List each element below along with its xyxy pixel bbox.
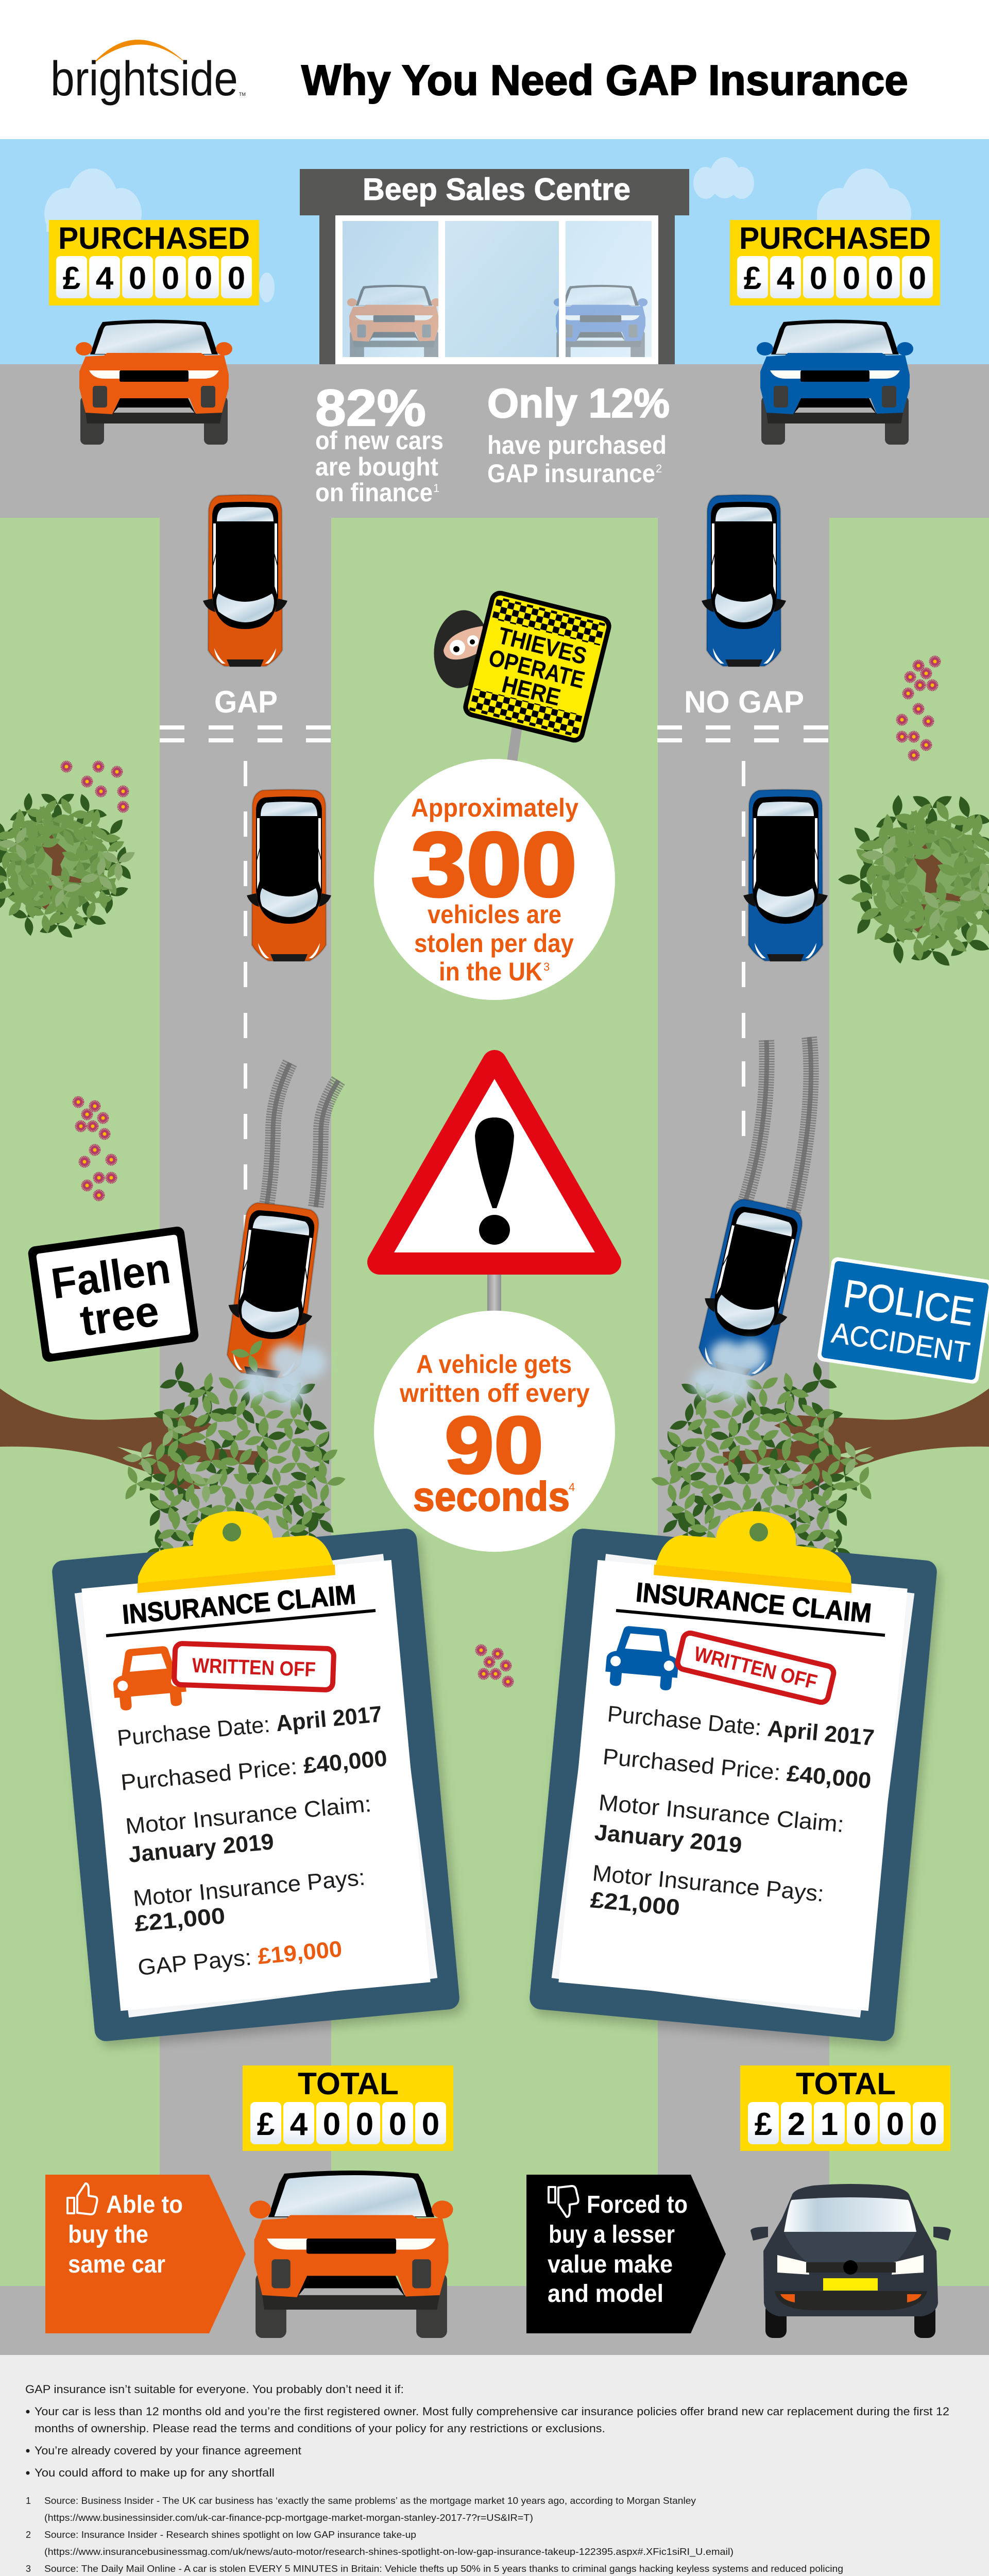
flowers — [62, 656, 940, 1687]
sources: Source: The Daily Mail Online - A car is stolen EVERY 5 MINUTES in Britain: Vehicle thefts up 50% in 5 years thanks to criminal gangs hacking keyless systems and reduced policing — [44, 2564, 843, 2574]
written off stamp — [676, 1632, 835, 1704]
price sign right: PURCHASED — [739, 221, 931, 256]
circle stat: 300 stolen: Approximately — [411, 793, 578, 822]
police accident sign: ACCIDENT — [829, 1316, 972, 1369]
crashed blue car — [690, 1195, 811, 1381]
road label NO GAP: NO GAP — [684, 685, 804, 719]
disclaimer text: Your car is less than 12 months old and you’re the first registered owner. Most fully comprehensive car insurance policies offer brand new car replacement during the first 12 — [35, 2405, 949, 2418]
clipboard right — [528, 1511, 938, 2042]
stat: 82% finance: on finance — [315, 478, 433, 507]
brightside logo: TM — [239, 92, 246, 97]
road right — [658, 518, 829, 2290]
road top — [0, 364, 989, 518]
blue car top view 1 — [702, 495, 786, 667]
claim details: GAP Pays: £19,000 — [137, 1936, 343, 1980]
clouds — [44, 157, 911, 302]
written off stamp: WRITTEN OFF — [192, 1654, 316, 1681]
price sign left — [49, 220, 259, 306]
stat: only 12% GAP: GAP insurance — [487, 459, 655, 488]
grass — [0, 518, 989, 2286]
police accident sign: POLICE — [841, 1272, 977, 1334]
claim details: £21,000 — [589, 1887, 681, 1921]
claim details: Purchased Price: £40,000 — [120, 1745, 388, 1795]
total sign left — [243, 2065, 453, 2151]
arrow: forced to buy a lesser value make and model: and model — [548, 2280, 663, 2308]
circle stat: written off every 90 seconds: seconds — [413, 1473, 570, 1519]
total sign right: £21000 — [755, 2107, 937, 2142]
sales centre building — [300, 169, 689, 364]
car icon — [604, 1624, 681, 1691]
clipboard left — [51, 1511, 461, 2042]
claim details: Purchase Date: April 2017 — [116, 1702, 383, 1751]
sources: (https://www.businessinsider.com/uk-car-finance-pcp-mortgage-market-morgan-stanley-2017-7?r=US&IR=T) — [44, 2513, 533, 2523]
claim details: Motor Insurance Pays: — [591, 1860, 825, 1907]
arrow: forced to buy a lesser value make and model: Forced to — [587, 2191, 688, 2218]
thieves operate here sign — [461, 588, 613, 745]
circle stat: written off every 90 seconds: 4 — [569, 1481, 575, 1494]
warning triangle sign — [380, 1062, 609, 1314]
circle stat: written off every 90 seconds: written off every — [399, 1379, 590, 1408]
arrow: forced to buy a lesser value make and model: value make — [548, 2251, 673, 2278]
stat: 82% finance: are bought — [315, 452, 438, 481]
clip — [654, 1511, 851, 1593]
claim details — [116, 1702, 388, 1980]
orange car front — [76, 319, 232, 445]
circle stat: 300 stolen: in the UK — [439, 957, 542, 986]
sources: (https://www.insurancebusinessmag.com/uk/news/auto-motor/research-shines-spotlight-on-low-gap-insurance-takeup-122395.aspx#.XFic1siRI_U.email) — [44, 2547, 734, 2557]
price sign left: £40000 — [63, 261, 245, 296]
claim details: January 2019 — [127, 1829, 275, 1868]
circle stat: written off every 90 seconds — [374, 1311, 615, 1552]
circle stat: written off every 90 seconds: A vehicle gets — [416, 1350, 572, 1379]
lesser value dark car — [751, 2184, 951, 2338]
shop sign text: Beep Sales Centre — [363, 172, 630, 207]
icon: thumbs up — [67, 2183, 97, 2214]
sources: 2 — [26, 2530, 31, 2540]
claim details: £21,000 — [133, 1903, 226, 1937]
claim details: Purchased Price: £40,000 — [602, 1744, 872, 1793]
blue car front — [757, 319, 913, 445]
claim details: Motor Insurance Claim: — [598, 1790, 845, 1837]
stat: 82% finance: 82% — [315, 379, 426, 437]
arrow: able to buy the same car: buy the — [68, 2221, 148, 2248]
sources: 3 — [26, 2564, 31, 2574]
sources — [26, 2496, 843, 2576]
claim details: Purchase Date: April 2017 — [606, 1701, 875, 1751]
orange car top view 1 — [203, 495, 287, 667]
arrow: able to buy the same car: Able to — [106, 2191, 183, 2218]
arrow: forced to buy a lesser value make and model: buy a lesser — [549, 2221, 675, 2248]
circle stat: 300 stolen: vehicles are — [428, 900, 561, 929]
stat: only 12% GAP: Only 12% — [487, 380, 670, 426]
disclaimer text: You’re already covered by your finance agreement — [35, 2444, 301, 2457]
stat: 82% finance: 1 — [433, 482, 439, 495]
arrow: able to buy the same car — [45, 2175, 246, 2333]
car icon — [110, 1645, 187, 1711]
disclaimer text: GAP insurance isn’t suitable for everyone. You probably don’t need it if: — [25, 2383, 404, 2396]
fallen tree sign: tree — [77, 1286, 162, 1345]
title: Why You Need GAP Insurance — [301, 56, 908, 104]
claim details — [589, 1701, 875, 1921]
fallen tree trunk left — [0, 1388, 266, 1489]
road left — [160, 518, 331, 2290]
orange car large — [249, 2171, 453, 2338]
skid marks right — [745, 1037, 811, 1217]
claim details: Motor Insurance Pays: — [132, 1865, 366, 1911]
thieves operate here sign: OPERATE — [486, 644, 588, 693]
circle stat: 300 stolen: 3 — [543, 960, 550, 973]
police accident sign — [817, 1257, 989, 1384]
crashed orange car — [220, 1200, 326, 1381]
claim details: Motor Insurance Claim: — [124, 1791, 372, 1839]
written off stamp: WRITTEN OFF — [692, 1642, 820, 1694]
road label GAP: GAP — [214, 685, 278, 719]
thieves operate here sign: HERE — [499, 670, 563, 711]
tree left — [0, 778, 144, 941]
skid marks left — [266, 1063, 338, 1207]
smoke right — [692, 1341, 766, 1400]
disclaimer text: You could afford to make up for any shortfall — [35, 2466, 275, 2479]
circle stat: written off every 90 seconds: 90 — [445, 1400, 543, 1490]
stat: only 12% GAP — [487, 380, 670, 488]
sources: 1 — [26, 2496, 31, 2506]
tree right — [834, 777, 989, 970]
stat: 82% finance — [315, 379, 444, 507]
sky — [0, 139, 989, 364]
fallen foliage right — [646, 1359, 878, 1584]
price sign right — [730, 220, 940, 306]
fallen tree sign — [27, 1226, 199, 1363]
claim details: January 2019 — [593, 1820, 743, 1858]
arrow: able to buy the same car: same car — [68, 2251, 165, 2278]
total sign right: TOTAL — [796, 2066, 896, 2101]
stat: 82% finance: of new cars — [315, 426, 444, 455]
fallen foliage left — [119, 1328, 350, 1584]
price sign left: PURCHASED — [58, 221, 250, 256]
circle stat: 300 stolen: 300 — [411, 814, 577, 916]
claim heading: INSURANCE CLAIM — [121, 1580, 357, 1630]
total sign left: TOTAL — [298, 2066, 399, 2101]
header background — [0, 0, 989, 139]
sources: Source: Insurance Insider - Research shines spotlight on low GAP insurance take-up — [44, 2530, 416, 2540]
brightside logo: brightside — [50, 52, 238, 106]
disclaimer text — [25, 2383, 949, 2479]
claim heading: INSURANCE CLAIM — [635, 1577, 873, 1629]
blue car top view 2 — [743, 789, 828, 961]
stat: only 12% GAP: have purchased — [487, 431, 667, 460]
smoke left — [242, 1344, 326, 1405]
circle stat: 300 stolen: stolen per day — [414, 929, 574, 958]
thief behind sign — [429, 607, 493, 691]
fallen tree trunk right — [723, 1388, 989, 1489]
arrow: forced to buy a lesser value make and model — [526, 2175, 726, 2333]
written off stamp — [174, 1643, 334, 1690]
circle stat: 300 stolen — [374, 759, 615, 1000]
sources: Source: Business Insider - The UK car business has ‘exactly the same problems’ as the mortgage market 10 years ago, according to Morgan Stanley — [44, 2496, 696, 2506]
footer panel — [0, 2355, 989, 2576]
fallen tree sign: Fallen — [48, 1244, 173, 1308]
disclaimer text: months of ownership. Please read the terms and conditions of your policy for any restrictions or exclusions. — [35, 2422, 605, 2435]
orange car top view 2 — [247, 789, 331, 961]
total sign right — [740, 2065, 950, 2151]
thieves operate here sign: THIEVES — [496, 622, 589, 670]
thieves sign pole — [512, 726, 517, 761]
icon: thumbs down — [549, 2186, 578, 2217]
clip — [138, 1511, 335, 1593]
total sign left: £40000 — [257, 2107, 439, 2142]
stat: only 12% GAP: 2 — [656, 462, 662, 475]
price sign right: £40000 — [744, 261, 926, 296]
